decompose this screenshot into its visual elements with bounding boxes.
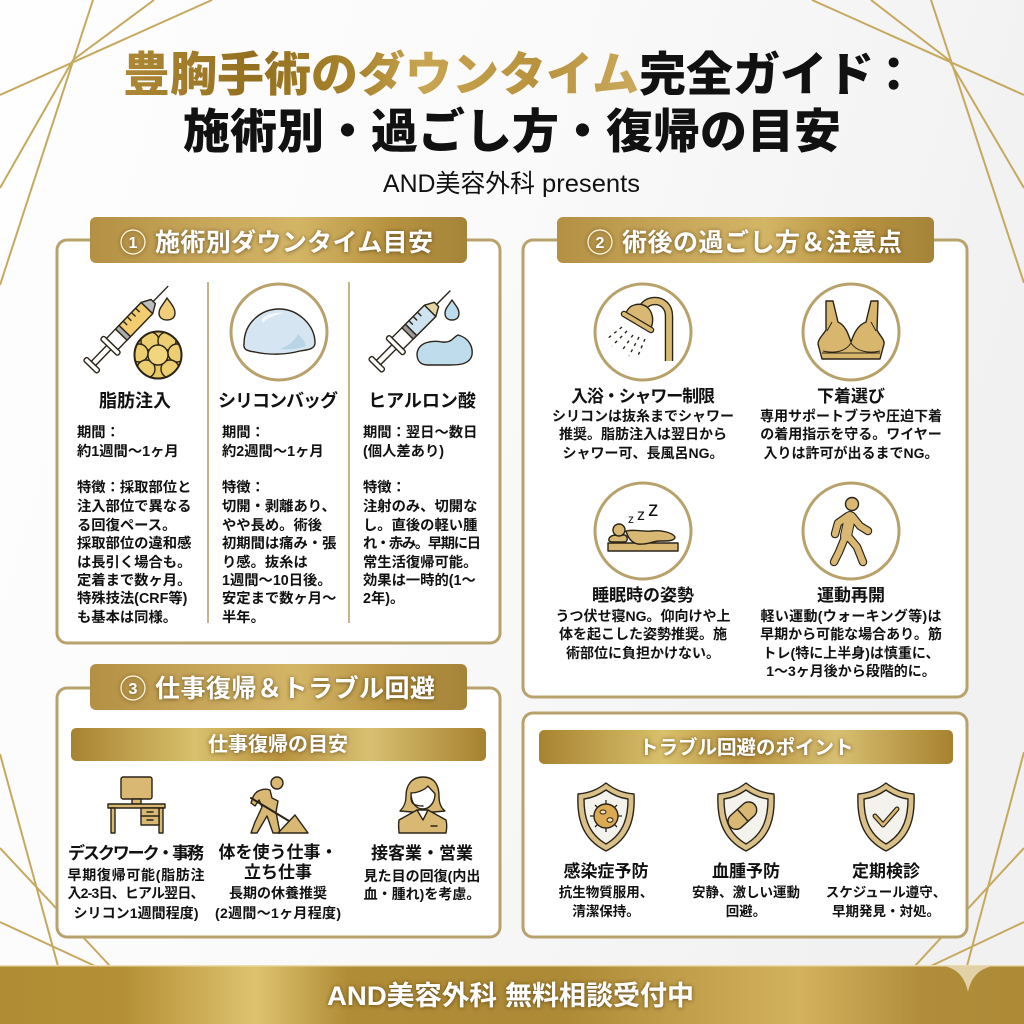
item: bathing: シリコンは抜糸までシャワー: [552, 408, 734, 424]
column: hyaluronic acid: 特徴：: [363, 478, 406, 496]
column: fat injection: は長引く場合も。: [77, 554, 191, 571]
item: underwear: 下着選び: [817, 386, 885, 406]
column: silicone bag: [218, 390, 338, 626]
item: customer work: [364, 843, 480, 902]
heading: section 3: [90, 664, 467, 710]
heading: section 2: [557, 217, 934, 263]
item: sleeping posture: [556, 586, 730, 661]
item: exercise: 早期から可能な場合あり。筋: [760, 626, 942, 642]
subtitle: presents: [542, 170, 640, 198]
column: hyaluronic acid: 常生活復帰可能。: [363, 553, 477, 571]
column: fat injection: 特殊技法(CRF等): [77, 589, 188, 607]
icon: bra: [803, 284, 899, 380]
column: fat injection: 約1週間〜1ヶ月: [77, 443, 179, 460]
subtitle: AND美容外科: [383, 170, 535, 198]
item: sleeping posture: うつ伏せ寝NG。仰向けや上: [556, 608, 730, 624]
column: silicone bag: 期間：: [222, 424, 265, 441]
item: hematoma prevention: [692, 862, 800, 919]
subtitle: [383, 170, 640, 198]
item: physical work: [215, 843, 341, 921]
column: fat injection: [77, 391, 191, 626]
column: fat injection: 脂肪注入: [99, 391, 171, 411]
column: hyaluronic acid: し。直後の軽い腫: [363, 516, 477, 534]
icon: manual worker: [251, 777, 308, 833]
item: desk work: 早期復帰可能(脂肪注: [68, 867, 204, 883]
heading: section 2: 2: [596, 235, 605, 252]
item: exercise: [760, 586, 942, 679]
footer banner: AND美容外科: [327, 981, 497, 1011]
item: physical work: 立ち仕事: [244, 863, 312, 882]
column: hyaluronic acid: [363, 391, 481, 607]
column: hyaluronic acid: 効果は一時的(1〜: [363, 571, 476, 589]
item: underwear: 専用サポートブラや圧迫下着: [760, 408, 942, 424]
column: hyaluronic acid: れ・赤み。早期に日: [363, 535, 481, 552]
item: infection prevention: 抗生物質服用、: [559, 884, 653, 900]
column: silicone bag: り感。抜糸は: [222, 553, 308, 571]
panel: return to work: [57, 664, 500, 937]
item: sleeping posture: 睡眠時の姿勢: [592, 586, 694, 605]
title: [123, 48, 917, 158]
column: hyaluronic acid: 注射のみ、切開な: [363, 497, 477, 515]
icon: sleeping: z: [637, 507, 645, 524]
icon: shield with capsule: [718, 783, 774, 851]
item: regular checkups: [826, 862, 946, 919]
column: fat injection: 定着まで数ヶ月。: [77, 571, 191, 589]
column: silicone bag: 初期間は痛み・張: [222, 535, 337, 552]
heading: section 1: 施術別ダウンタイム目安: [155, 228, 433, 257]
heading: section 3: 3: [129, 681, 138, 698]
item: desk work: デスクワーク・事務: [68, 843, 204, 863]
subheading: trouble avoidance points: [539, 730, 953, 764]
item: underwear: の着用指示を守る。ワイヤー: [760, 426, 942, 442]
item: physical work: 体を使う仕事・: [218, 843, 338, 862]
subheading: return to work guide: 仕事復帰の目安: [208, 733, 348, 756]
column: silicone bag: 安定まで数ヶ月〜: [222, 589, 336, 607]
icon: sleeping: z: [648, 498, 658, 521]
subheading: trouble avoidance points: トラブル回避のポイント: [639, 736, 854, 759]
column: hyaluronic acid: 期間：翌日〜数日: [363, 423, 477, 441]
icon: desk: [108, 777, 165, 833]
item: exercise: 軽い運動(ウォーキング等)は: [760, 608, 942, 624]
column: silicone bag: 切開・剥離あり、: [222, 497, 336, 515]
item: infection prevention: [559, 861, 653, 919]
panel: downtime by procedure: [57, 217, 500, 643]
item: desk work: 入2-3日、ヒアル翌日、: [68, 885, 204, 901]
item: infection prevention: 清潔保持。: [572, 903, 640, 919]
item: regular checkups: 定期検診: [852, 862, 920, 881]
title: 豊胸手術のダウンタイム完全ガイド：: [123, 48, 917, 101]
heading: section 1: 1: [129, 235, 138, 252]
item: bathing: [552, 387, 734, 461]
item: desk work: シリコン1週間程度): [74, 905, 198, 921]
icon: sleeping: [595, 483, 691, 579]
item: bathing: シャワー可、長風呂NG。: [562, 445, 724, 461]
column: fat injection: 期間：: [77, 424, 120, 441]
icon: shield with virus: [578, 783, 634, 851]
column: hyaluronic acid: 2年)。: [363, 589, 404, 607]
column: hyaluronic acid: (個人差あり): [363, 442, 444, 460]
item: exercise: 1〜3ヶ月後から段階的に。: [766, 663, 936, 679]
column: silicone bag: 1週間〜10日後。: [222, 571, 332, 589]
column: fat injection: も基本は同様。: [77, 608, 177, 626]
item: hematoma prevention: 血腫予防: [712, 862, 780, 881]
icon: hyaluronic acid syringe: [367, 283, 472, 374]
heading: section 2: 術後の過ごし方＆注意点: [622, 228, 902, 257]
column: silicone bag: シリコンバッグ: [218, 390, 338, 411]
item: hematoma prevention: 回避。: [726, 903, 766, 919]
item: bathing: 入浴・シャワー制限: [571, 387, 715, 406]
footer banner: [0, 965, 1024, 1024]
item: physical work: 長期の休養推奨: [229, 885, 327, 901]
icon: fat injection syringe: [83, 286, 182, 380]
column: silicone bag: 約2週間〜1ヶ月: [222, 443, 324, 460]
item: bathing: 推奨。脂肪注入は翌日から: [559, 426, 727, 442]
column: fat injection: る回復ペース。: [77, 517, 176, 534]
item: exercise: 運動再開: [817, 586, 885, 605]
title: 施術別・過ごし方・復帰の目安: [183, 105, 841, 158]
item: customer work: 見た目の回復(内出: [364, 868, 480, 884]
heading: section 1: [90, 217, 467, 263]
item: sleeping posture: 体を起こした姿勢推奨。施: [559, 626, 727, 642]
column: fat injection: 特徴：採取部位と: [77, 478, 191, 496]
item: desk work: [68, 843, 204, 921]
item: underwear: 入りは許可が出るまでNG。: [764, 445, 938, 461]
icon: sleeping: z: [628, 512, 634, 526]
icon: shield with check: [858, 783, 914, 851]
footer banner: 無料相談受付中: [505, 981, 694, 1011]
item: hematoma prevention: 安静、激しい運動: [692, 884, 800, 900]
subheading: return to work guide: [71, 728, 486, 761]
column: hyaluronic acid: ヒアルロン酸: [368, 391, 476, 411]
item: regular checkups: スケジュール遵守、: [826, 884, 946, 900]
panel: post-op care: [523, 217, 967, 697]
column: silicone bag: 半年。: [222, 608, 265, 626]
item: sleeping posture: 術部位に負担かけない。: [566, 645, 720, 661]
item: physical work: (2週間〜1ヶ月程度): [215, 905, 341, 921]
item: regular checkups: 早期発見・対処。: [832, 903, 940, 919]
item: customer work: 血・腫れ)を考慮。: [364, 886, 480, 902]
item: customer work: 接客業・営業: [371, 843, 473, 863]
icon: silicone implant: [231, 284, 327, 380]
item: infection prevention: 感染症予防: [564, 861, 648, 881]
column: silicone bag: やや長め。術後: [222, 516, 323, 534]
column: fat injection: 採取部位の違和感: [77, 534, 191, 552]
column: fat injection: 注入部位で異なる: [77, 497, 191, 515]
item: underwear: [760, 386, 942, 461]
icon: shower: [595, 284, 691, 380]
icon: walking: [803, 483, 899, 579]
heading: section 3: 仕事復帰＆トラブル回避: [155, 674, 435, 703]
panel: avoiding trouble: [523, 713, 967, 937]
icon: customer service: [399, 777, 447, 833]
item: exercise: トレ(特に上半身)は慎重に、: [763, 645, 939, 661]
column: silicone bag: 特徴：: [222, 478, 265, 496]
